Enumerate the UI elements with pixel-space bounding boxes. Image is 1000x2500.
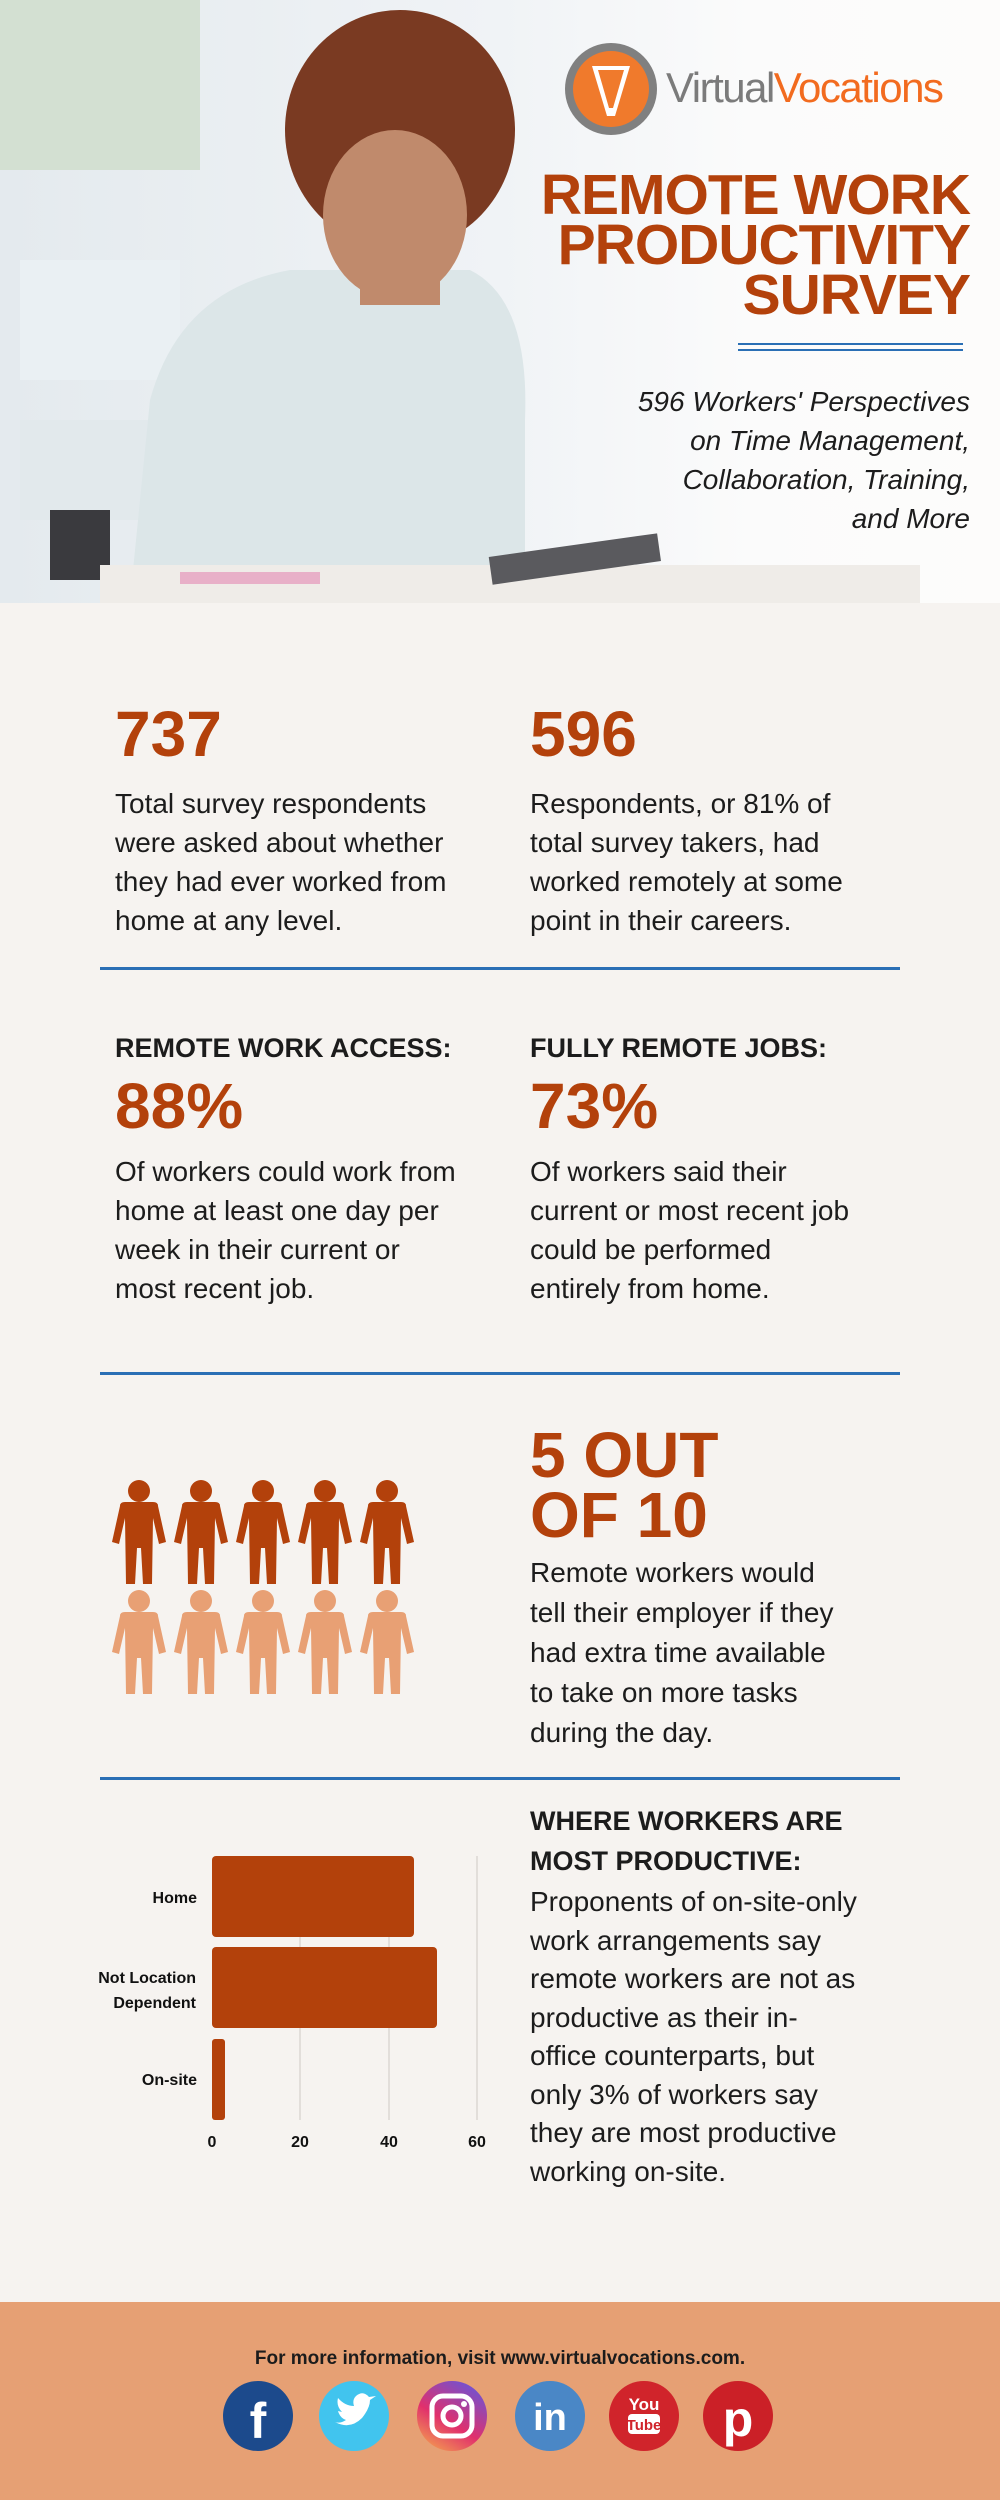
bar chart: where workers are most productive: Not Location [98,1970,196,1987]
header photo [0,0,1000,603]
bar chart: where workers are most productive: On-site [142,2072,197,2089]
icon: logo V circle [565,43,657,135]
stat: fully remote jobs: Of workers said their [530,1156,787,1187]
icons: social media: in [533,2397,567,2439]
stat: 596: Respondents, or 81% of [530,788,830,819]
stat: fully remote jobs: could be performed [530,1234,771,1265]
icons: social media: You [629,2395,659,2414]
bar chart: where workers are most productive [98,1856,486,2151]
stat: where workers are most productive: remote workers are not as [530,1963,855,1994]
stat: remote work access: 88% [115,1070,243,1142]
stat: where workers are most productive: work arrangements say [530,1924,821,1956]
stat: where workers are most productive: only 3% of workers say [530,2078,818,2110]
stat: 596 [530,698,843,936]
subtitle [638,386,970,534]
subtitle: 596 Workers' Perspectives [638,386,970,417]
stat: remote work access: most recent job. [115,1273,314,1304]
stat: 737: 737 [115,698,222,770]
stat: 596: worked remotely at some [530,866,843,897]
stat: 5 out of 10: had extra time available [530,1637,826,1668]
stat: remote work access [115,1033,456,1304]
stat: 596: 596 [530,698,637,770]
stat: fully remote jobs [530,1033,849,1304]
stat: fully remote jobs: entirely from home. [530,1273,770,1304]
stat: 5 out of 10: during the day. [530,1717,713,1748]
stat: fully remote jobs: FULLY REMOTE JOBS: [530,1033,827,1063]
bar chart: where workers are most productive: 20 [291,2134,309,2151]
title: PRODUCTIVITY [558,213,970,277]
stat: remote work access: week in their current or [115,1234,400,1265]
subtitle: and More [852,503,970,534]
title [541,163,970,327]
stat: 737: they had ever worked from [115,866,446,897]
icons: social media [223,2381,773,2451]
stat: 737: home at any level. [115,905,342,936]
stat: 5 out of 10: tell their employer if they [530,1597,833,1628]
stat: 737: were asked about whether [115,827,443,858]
stat: 5 out of 10: 5 OUT [530,1419,718,1491]
stat: where workers are most productive: office counterparts, but [530,2040,814,2071]
logo: VirtualVocations [666,64,942,111]
stat: fully remote jobs: current or most recent job [530,1195,849,1226]
title: SURVEY [743,263,970,327]
stat: 5 out of 10 [530,1419,834,1748]
bar chart: where workers are most productive: Home [153,1890,197,1907]
subtitle: on Time Management, [690,425,970,456]
stat: 737 [115,698,446,936]
icons: social media: p [723,2391,753,2447]
footer [0,2302,1000,2500]
stat: 5 out of 10: OF 10 [530,1479,708,1551]
bar chart: where workers are most productive: Dependent [113,1995,197,2012]
stat: remote work access: home at least one day per [115,1195,439,1226]
stat: 5 out of 10: to take on more tasks [530,1677,798,1708]
stat: where workers are most productive: Proponents of on-site-only [530,1886,857,1917]
logo [565,43,942,135]
stat: where workers are most productive: productive as their in- [530,2002,798,2032]
bar chart: where workers are most productive: 0 [208,2134,217,2151]
bar chart: where workers are most productive: 40 [380,2134,398,2151]
stat: where workers are most productive: WHERE WORKERS ARE [530,1806,843,1836]
stat: fully remote jobs: 73% [530,1070,658,1142]
stat: 5 out of 10: Remote workers would [530,1557,815,1588]
stat: where workers are most productive [530,1806,857,2187]
stat: 737: Total survey respondents [115,788,426,819]
stat: where workers are most productive: they are most productive [530,2117,837,2148]
bar chart: where workers are most productive: 60 [468,2134,486,2151]
stat: where workers are most productive: working on-site. [530,2156,726,2186]
icons: social media: f [250,2393,267,2449]
stat: remote work access: Of workers could work from [115,1156,456,1187]
icons: social media: Tube [627,2417,661,2434]
stat: 596: point in their careers. [530,905,791,936]
stat: remote work access: REMOTE WORK ACCESS: [115,1033,452,1063]
subtitle: Collaboration, Training, [683,464,970,495]
pictogram: 5 out of 10 people [112,1480,414,1694]
stat: 596: total survey takers, had [530,827,819,858]
footer: For more information, visit www.virtualvocations.com. [255,2348,745,2369]
title: REMOTE WORK [541,163,970,227]
stat: where workers are most productive: MOST PRODUCTIVE: [530,1846,802,1876]
